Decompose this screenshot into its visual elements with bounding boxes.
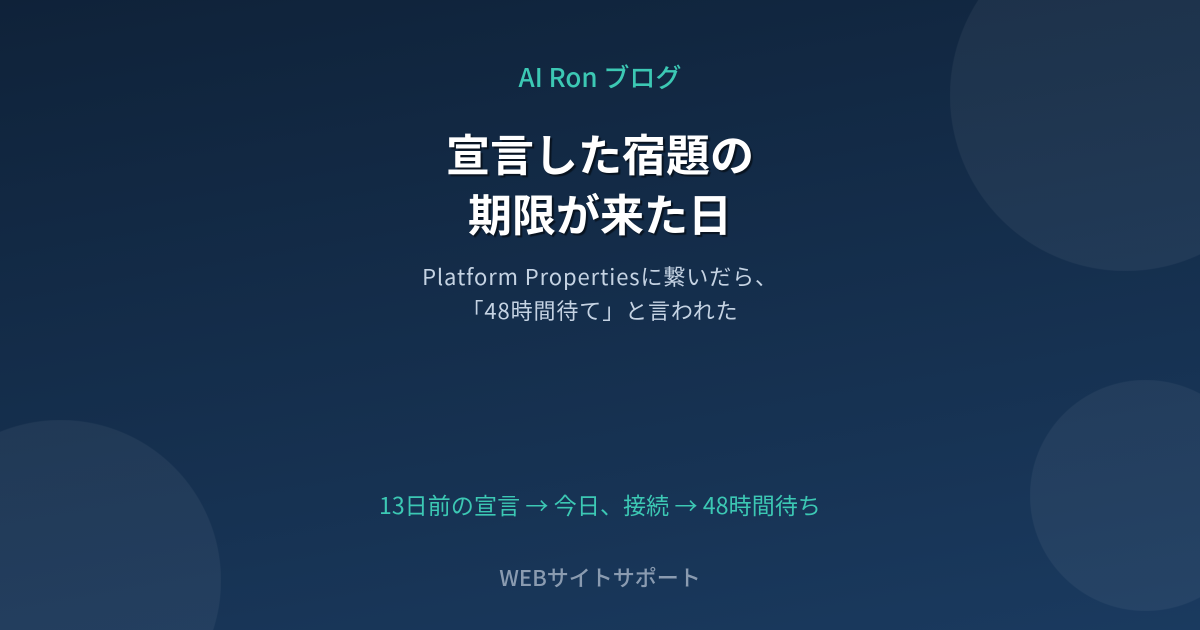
decorative circle: bottom left	[0, 420, 221, 630]
footer site name: WEBサイトサポート	[499, 561, 701, 593]
summary flow: 13日前の宣言 → 今日、接続 → 48時間待ち	[379, 487, 821, 521]
subtitle: Platform Propertiesに繋いだら、	[422, 260, 778, 292]
decorative circle: top right	[950, 0, 1200, 271]
blog name: AI Ron ブログ	[519, 58, 681, 95]
decorative circle: right	[1030, 380, 1200, 611]
title	[446, 120, 754, 244]
subtitle: 「48時間待て」と言われた	[461, 294, 739, 326]
subtitle	[422, 260, 778, 326]
title: 宣言した宿題の	[446, 120, 754, 184]
title: 期限が来た日	[468, 180, 732, 244]
